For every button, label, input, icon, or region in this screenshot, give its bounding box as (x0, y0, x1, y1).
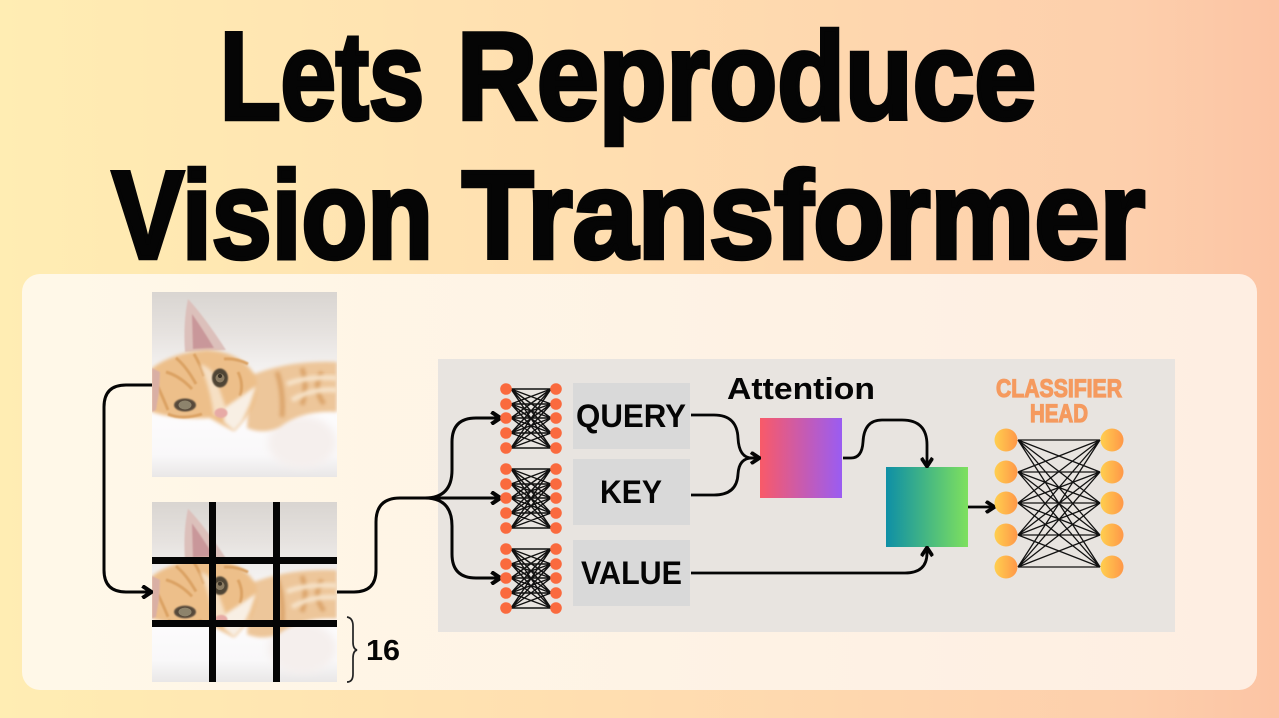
network: value (500, 543, 562, 614)
title: Vision (112, 147, 433, 285)
image: cat split into patches (152, 502, 337, 682)
title: Transformer (462, 147, 1145, 285)
label: classifier head: HEAD (1030, 400, 1088, 428)
box: key (573, 459, 690, 525)
title: Reproduce (457, 8, 1036, 146)
title: Lets (220, 8, 424, 146)
box: query (573, 383, 690, 449)
label: 16: 16 (366, 635, 400, 667)
panel: diagram card (22, 274, 1257, 690)
brace: patch count (347, 617, 357, 682)
box: key: KEY (600, 474, 662, 510)
panel: attention pipeline (438, 359, 1175, 632)
network: key (500, 463, 562, 534)
block: attention output (886, 467, 968, 547)
box: query: QUERY (576, 398, 686, 434)
box: value: VALUE (581, 555, 682, 591)
label: classifier head: CLASSIFIER (996, 375, 1122, 403)
arrow: image to patches (104, 385, 152, 592)
box: value (573, 540, 690, 606)
label: attention: Attention (727, 371, 875, 406)
label: classifier head (996, 375, 1122, 428)
image: cat (152, 292, 337, 477)
arrows: query key value to blocks (691, 415, 994, 573)
arrows: patches to networks (337, 418, 500, 592)
block: attention matrix (760, 418, 842, 498)
network: classifier head (994, 428, 1124, 578)
title (112, 8, 1145, 285)
network: query (500, 383, 562, 454)
